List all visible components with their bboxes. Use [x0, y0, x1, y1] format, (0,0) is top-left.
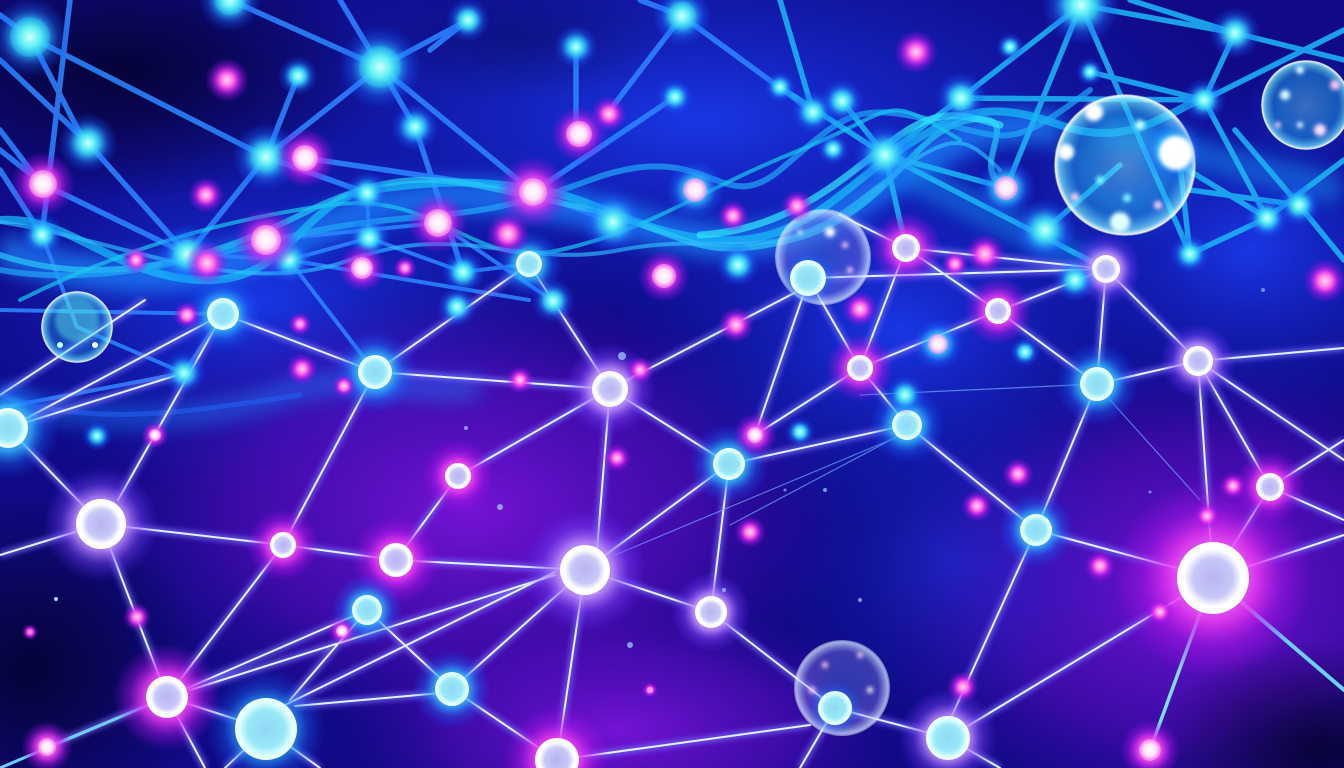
bubble: bottom centre	[794, 640, 890, 736]
upper network lines	[0, 0, 1344, 408]
bubble: centre	[775, 209, 871, 306]
lower network line glow	[0, 215, 1344, 768]
bubble: top right edge	[1246, 45, 1344, 165]
lower network lines	[0, 215, 1344, 768]
bubble: large top right	[1033, 73, 1217, 257]
cyan upper nodes	[0, 0, 1321, 451]
tiny sparkle stars	[54, 288, 1265, 648]
bubble: left	[41, 291, 113, 363]
flowing cyan waves	[0, 90, 1210, 414]
blue mist behind waves	[0, 126, 1340, 417]
white and purple lower nodes	[0, 156, 1313, 768]
